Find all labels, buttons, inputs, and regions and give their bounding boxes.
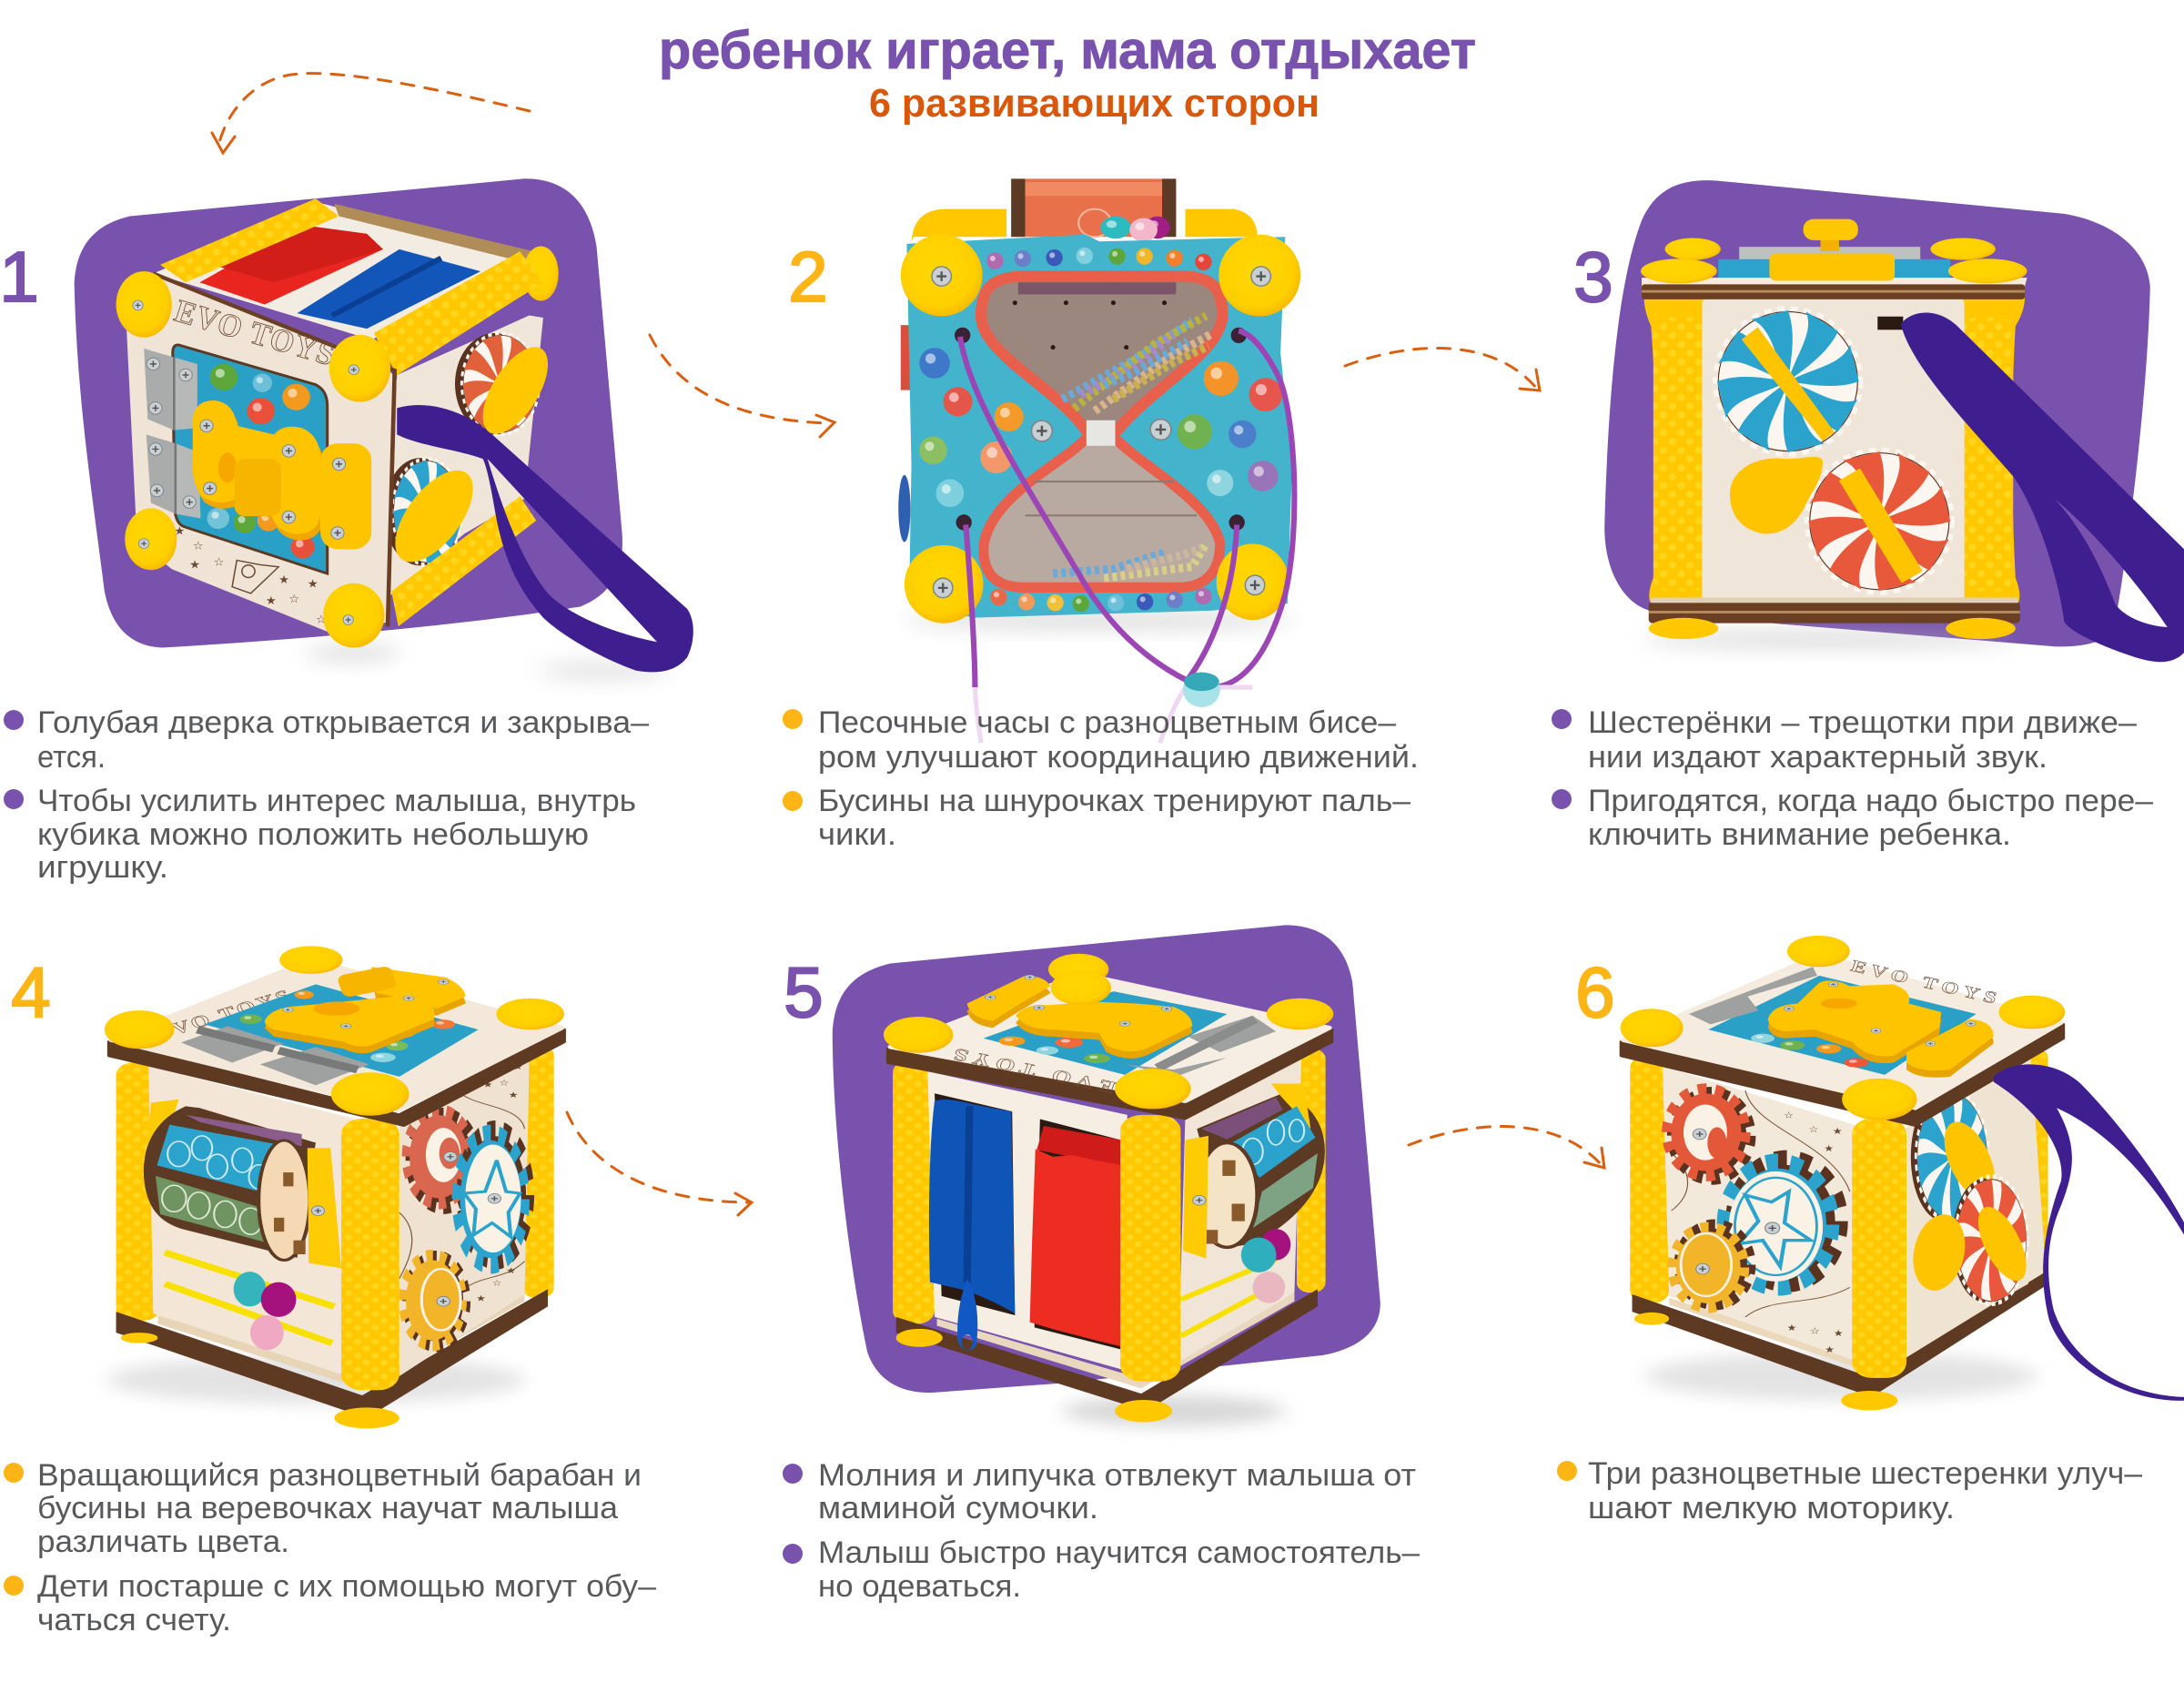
back posts [893, 1059, 935, 1324]
corner knobs [901, 235, 1300, 623]
hinge [1689, 967, 1817, 1024]
shadow [539, 661, 669, 680]
slots [935, 1093, 1015, 1315]
pinwheel blue [1704, 297, 1873, 466]
text block: panel 5: Малыш быстро научится самостоятель– [818, 1536, 1420, 1570]
gears [402, 1110, 530, 1346]
pinwheels [1907, 1080, 2036, 1314]
panel 4: drum and gears: ☆ [499, 1078, 509, 1088]
cube front face: ★ [278, 573, 289, 587]
number 2: 2 [788, 237, 828, 317]
door [204, 984, 479, 1077]
panel 6: gears side: ☆ [1808, 1124, 1818, 1135]
text block: panel 4: бусины на веревочках научат малыша [37, 1491, 618, 1526]
left face [1663, 1066, 1856, 1361]
title: ребенок играет, мама отдыхает [659, 21, 1476, 80]
blob [1604, 180, 2150, 646]
feet [1649, 618, 1718, 639]
panel 6: gears side: ★ [1824, 1143, 1834, 1154]
top plate edge [109, 1029, 564, 1125]
left side strap [901, 325, 911, 390]
arrow: top curved arrow to panel 1 [212, 74, 530, 153]
blue door [173, 345, 328, 573]
front post [341, 1119, 399, 1390]
latch knob [1048, 954, 1111, 1005]
red velcro strap [1036, 1126, 1123, 1167]
ribbon [1901, 313, 2184, 662]
text block: panel 2 [783, 705, 1419, 852]
text block: panel 3 [1552, 705, 2153, 852]
latch [265, 966, 466, 1053]
cube front face: ★ [308, 578, 318, 592]
panel 6: gears side: ☆ [1810, 1325, 1820, 1336]
number 1: 1 [0, 237, 39, 317]
top plate [891, 974, 1330, 1101]
blob [75, 178, 622, 648]
panel 4: drum and gears [105, 946, 564, 1428]
latch [967, 975, 1192, 1059]
text block: panel 1: Чтобы усилить интерес малыша, внутрь [37, 784, 636, 818]
cube front face: ☆ [214, 556, 225, 569]
cube right face [380, 316, 561, 626]
panel 6: gears side: ★ [1834, 1328, 1844, 1339]
engraved brand: EVO TOYS [1848, 957, 1999, 1007]
text block: panel 5 [783, 1458, 1420, 1604]
knobs [1621, 936, 2065, 1120]
top plate edge [1622, 1024, 2063, 1125]
pinwheel coral [1795, 438, 1964, 604]
right face [1178, 1059, 1301, 1363]
panel 4: drum and gears: ★ [483, 1080, 493, 1090]
hourglass top [981, 277, 1222, 430]
panel 1: cube with door and purple blob [75, 178, 693, 680]
door [1708, 976, 1977, 1075]
back knobs [912, 209, 1258, 241]
hinges [144, 349, 174, 431]
text block: panel 3: Пригодятся, когда надо быстро пере– [1588, 784, 2153, 818]
text block: panel 3: ключить внимание ребенка. [1588, 817, 2011, 852]
number 4: 4 [11, 952, 51, 1032]
text block: panel 4: Дети постарше с их помощью могут обу– [37, 1569, 656, 1604]
text block: panel 1: Голубая дверка открывается и закрыва– [37, 705, 649, 740]
front post [1120, 1115, 1180, 1382]
yellow drop [1730, 457, 1823, 534]
bumpy posts [1644, 298, 1709, 604]
number 6: 6 [1575, 952, 1615, 1032]
text block: panel 1: игрушку. [37, 850, 168, 885]
panel 4: drum and gears: ☆ [492, 1278, 502, 1288]
engraved brand: EVO TOYS [151, 986, 293, 1043]
cube front face: ☆ [288, 593, 299, 606]
blue zipper strap [929, 1100, 1015, 1313]
decor balls [919, 248, 1282, 612]
drum behind [1011, 178, 1176, 237]
bottom plate [1649, 602, 2020, 623]
bottom plate [116, 1289, 548, 1418]
cord holes [955, 328, 1247, 531]
faded cord ends [975, 687, 1253, 743]
bead on cord [1183, 672, 1220, 707]
panel 4: drum and gears: ★ [513, 1062, 523, 1072]
cube front face [126, 274, 397, 635]
back posts [1630, 1056, 1669, 1303]
left face [927, 1071, 1127, 1371]
engraved lines and stars [399, 1090, 525, 1285]
panel 4: drum and gears: ★ [506, 1266, 516, 1276]
knobs [105, 946, 564, 1116]
bead strings [1180, 1229, 1290, 1336]
cube front face: ☆ [193, 540, 204, 552]
bead strings [165, 1252, 334, 1350]
panel 4: drum and gears: ★ [476, 1293, 486, 1303]
subtitle: 6 развивающих сторон [869, 81, 1320, 126]
left face [148, 1066, 353, 1378]
text block: panel 4: чаться счету. [37, 1603, 231, 1637]
text block: panel 5: Молния и липучка отвлекут малыша от [818, 1458, 1416, 1493]
shadow [1062, 1395, 1285, 1426]
cube front face: ★ [174, 525, 185, 538]
arrow: panel 1 to panel 2 [650, 335, 834, 437]
drum [144, 1100, 341, 1268]
panel 4: drum and gears: ★ [509, 1090, 519, 1100]
engraved brand: EVO TOYS [951, 1044, 1118, 1097]
hourglass bottom [984, 439, 1220, 587]
text block: panel 4 [4, 1458, 656, 1637]
text block: panel 6: Три разноцветные шестеренки улуч– [1588, 1456, 2142, 1491]
text block: panel 4: Вращающийся разноцветный барабан и [37, 1458, 642, 1493]
text block: panel 5: но одеваться. [818, 1569, 1021, 1604]
front post [1852, 1119, 1906, 1378]
shadow [106, 1355, 525, 1404]
right face [399, 1059, 530, 1376]
engraved brand: EVO TOYS [170, 293, 339, 373]
hinges [181, 1026, 283, 1063]
text block: panel 4: различать цвета. [37, 1525, 289, 1559]
bottom plate [896, 1289, 1318, 1411]
top plate edge [888, 1029, 1331, 1119]
right face [1905, 1052, 2046, 1359]
gears [1667, 1090, 1841, 1308]
panel 6: gears side: ☆ [1784, 1110, 1794, 1120]
text block: panel 5: маминой сумочки. [818, 1491, 1098, 1526]
text block: panel 2: Бусины на шнурочках тренируют паль– [818, 784, 1410, 818]
text block: panel 3: нии издают характерный звук. [1588, 740, 2048, 775]
latch [196, 407, 323, 541]
text block: panel 2: ром улучшают координацию движений. [818, 740, 1419, 775]
panel 6: gears side [1621, 936, 2184, 1410]
number 5: 5 [784, 952, 824, 1032]
cube front face: ★ [189, 559, 200, 572]
cube front face: ☆ [316, 613, 327, 626]
text block: panel 6 [1557, 1456, 2142, 1526]
text block: panel 1: ется. [37, 740, 106, 775]
panel 6: gears side: ★ [1786, 1323, 1797, 1333]
blue face [906, 235, 1292, 618]
latch [1768, 980, 1994, 1078]
top plate [111, 960, 561, 1110]
text block: panel 1: кубика можно положить небольшую [37, 817, 589, 852]
panel 6: gears side: ★ [1833, 1126, 1843, 1137]
stars and rocket [232, 561, 278, 593]
top plate [1623, 955, 2061, 1108]
text block: panel 1 [4, 705, 649, 885]
shadow [1645, 1352, 2037, 1401]
arrow: panel 5 to panel 6 [1409, 1127, 1604, 1168]
beads on top [1100, 217, 1170, 242]
cube top face [153, 198, 559, 375]
door [984, 991, 1227, 1075]
corner knobs [116, 271, 390, 648]
text block: panel 2: Песочные часы с разноцветным бисе– [818, 705, 1396, 740]
ribbon [1994, 1064, 2184, 1401]
blob [833, 925, 1380, 1393]
top plate parts [1641, 219, 2027, 299]
knobs [884, 998, 1333, 1109]
panel 5: zipper and velcro [833, 925, 1380, 1426]
engraved lines and stars [1672, 1090, 1850, 1317]
lacing cords [960, 330, 1294, 688]
number 3: 3 [1573, 237, 1613, 317]
drum [1183, 1083, 1325, 1259]
text block: panel 2: чики. [818, 817, 896, 852]
zipper pull [957, 1280, 977, 1350]
shadow [1642, 631, 2013, 648]
hinges [1125, 1058, 1227, 1077]
panel 2: hourglass side [898, 178, 1300, 743]
panel 3: pinwheels side [1604, 180, 2184, 662]
text block: panel 3: Шестерёнки – трещотки при движе– [1588, 705, 2137, 740]
beads in hourglass [1053, 316, 1211, 578]
cube front face: ★ [266, 594, 277, 608]
wood face [1702, 299, 1965, 601]
back posts [116, 1063, 160, 1321]
arrow: panel 4 to panel 5 [567, 1112, 752, 1215]
panel 6: gears side: ★ [1825, 1344, 1835, 1355]
shadow [905, 612, 1294, 628]
text block: panel 6: шают мелкую моторику. [1588, 1491, 1955, 1526]
ribbon [397, 405, 693, 672]
bottom plate [1633, 1272, 2046, 1397]
arrow: panel 2 to panel 3 [1345, 348, 1540, 390]
